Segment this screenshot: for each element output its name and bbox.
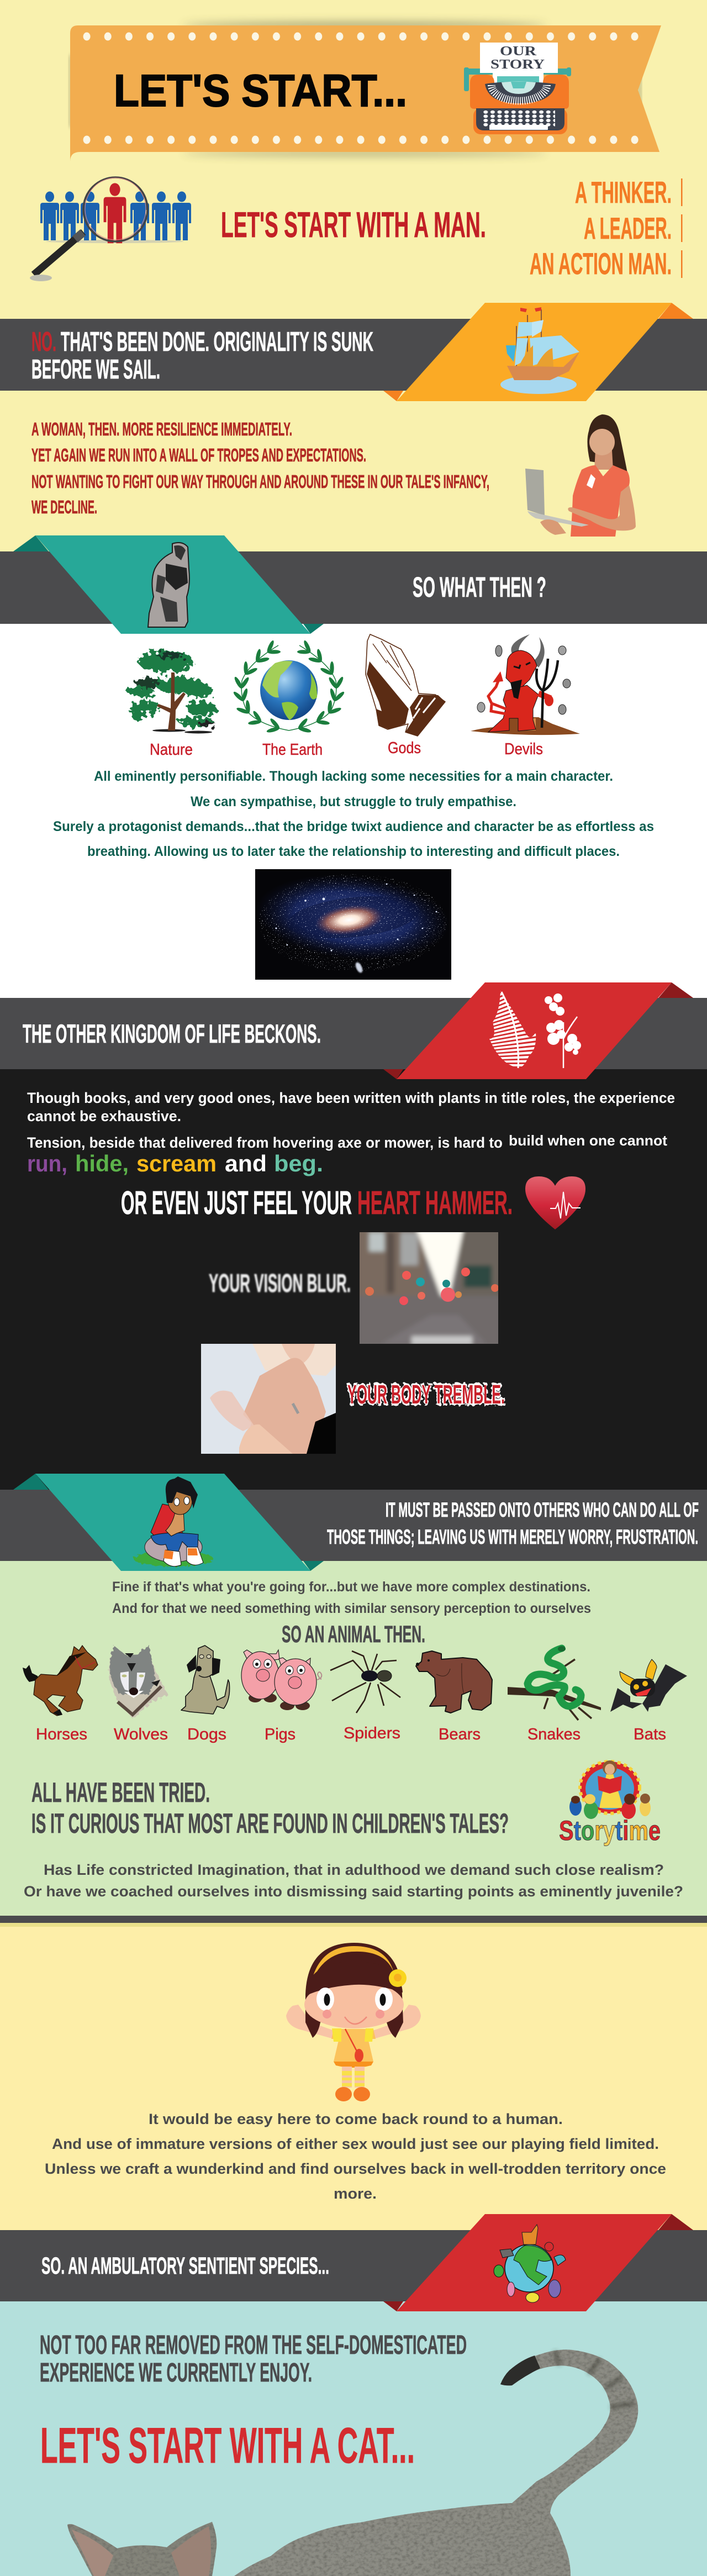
panel: animals green section (0, 1561, 707, 1916)
labels: animals: Horses (36, 1726, 87, 1743)
icon: horse (23, 1646, 98, 1716)
text: all eminently personifiable: breathing. Allowing us to later take the relationship to interesting and difficult places. (87, 844, 620, 859)
text: all eminently personifiable (53, 769, 654, 859)
ribbon: so what then (0, 535, 707, 634)
icon: crowd with magnifying glass (30, 177, 191, 281)
heading: let's start with a man: LET'S START WITH A MAN. (221, 204, 486, 245)
panel: let's start intro (0, 0, 707, 553)
heading: so an animal then: SO AN ANIMAL THEN. (282, 1621, 425, 1648)
text: it must be passed onto others (327, 1499, 699, 1548)
heading: heart hammer: HEART HAMMER. (357, 1185, 513, 1221)
labels: animals: Snakes (527, 1726, 581, 1743)
text: easy to come back to a human: It would be easy here to come back round to a human. (149, 2111, 563, 2127)
text: no that's been done: BEFORE WE SAIL. (31, 355, 160, 385)
text: no that's been done: THAT'S BEEN DONE. ORIGINALITY IS SUNK (61, 327, 373, 357)
heading: all have been tried (31, 1777, 509, 1839)
icon: little girl (286, 1943, 421, 2101)
text: a woman then: WE DECLINE. (31, 497, 97, 517)
icon: snake on branch (508, 1646, 601, 1720)
text: run hide scream beg (27, 1150, 323, 1176)
text: your vision blur: YOUR VISION BLUR. (209, 1269, 351, 1297)
image: cat body and tail (234, 2349, 638, 2576)
text: a woman then (31, 419, 489, 517)
text: plants paragraph: Though books, and very good ones, have been written with plants in title roles, the experience (27, 1090, 675, 1106)
banner ribbon (69, 22, 661, 161)
text: not too far removed (40, 2331, 467, 2388)
text: a woman then: A WOMAN, THEN. MORE RESILIENCE IMMEDIATELY. (31, 419, 292, 439)
icon: pigs (241, 1650, 321, 1710)
text: complex destinations (112, 1579, 591, 1616)
icon: praying hands (366, 634, 445, 736)
text: no that's been done: NO. (31, 327, 56, 357)
text: a woman then: YET AGAIN WE RUN INTO A WALL OF TROPES AND EXPECTATIONS. (31, 445, 366, 465)
icon: dog (181, 1646, 230, 1714)
icon: earth in wreath (232, 639, 346, 737)
ribbon: other kingdom of life (0, 982, 707, 1079)
ribbon: ambulatory sentient species (0, 2214, 707, 2311)
icon: spider (330, 1651, 400, 1713)
text: easy to come back to a human (45, 2111, 666, 2202)
icon: storytime badge (559, 1760, 661, 1846)
panel: other kingdom of life dark section (0, 1069, 707, 1490)
text: run hide scream beg: run, (27, 1150, 67, 1176)
text: your body tremble: YOUR BODY TREMBLE. (347, 1380, 505, 1410)
heading: ambulatory sentient species: SO. AN AMBULATORY SENTIENT SPECIES... (41, 2253, 329, 2279)
text: has life constricted imagination (24, 1862, 683, 1900)
icon: storytime badge: Storytime (559, 1815, 661, 1846)
text: plants paragraph: build when one cannot (509, 1132, 667, 1149)
image: galaxy (252, 867, 453, 980)
heading: other kingdom: THE OTHER KINGDOM OF LIFE BECKONS. (23, 1019, 321, 1048)
labels: personifications (150, 739, 543, 759)
image: cat head and ears (67, 2522, 217, 2576)
ribbon: it must be passed onto others (0, 1474, 707, 1571)
labels: personifications: Nature (150, 741, 193, 759)
heading: let's start with a cat: LET'S START WITH A CAT... (40, 2418, 415, 2474)
text: run hide scream beg: hide, (75, 1150, 129, 1176)
icon: woman with laptop (525, 414, 636, 537)
labels: animals (36, 1725, 666, 1743)
icon: bat (610, 1659, 687, 1712)
text: plants paragraph: cannot be exhaustive. (27, 1108, 181, 1124)
panel: cat teal section (0, 2301, 707, 2576)
text: plants paragraph: Tension, beside that delivered from hovering axe or mower, is hard to (27, 1134, 503, 1151)
text: complex destinations: And for that we need something with similar sensory perception to ourselves (112, 1601, 591, 1616)
text: complex destinations: Fine if that's what you're going for...but we have more complex destinations. (112, 1579, 590, 1595)
text: has life constricted imagination: Or have we coached ourselves into dismissing said starting points as eminently juvenile? (24, 1883, 683, 1900)
icon: globe with animals (494, 2225, 566, 2302)
heading: so what then: SO WHAT THEN ? (413, 571, 546, 603)
labels: animals: Pigs (265, 1726, 296, 1743)
heading: heart hammer: OR EVEN JUST FEEL YOUR (121, 1185, 352, 1221)
heading: all have been tried: ALL HAVE BEEN TRIED. (31, 1777, 210, 1808)
text: run hide scream beg: scream (136, 1150, 217, 1176)
panel: child section (0, 1916, 707, 2230)
text: has life constricted imagination: Has Life constricted Imagination, that in adulthood we demand such close realism? (44, 1862, 664, 1878)
labels: animals: Bats (634, 1726, 666, 1743)
ribbon: no that's been done (0, 303, 707, 401)
text: all eminently personifiable: Surely a protagonist demands...that the bridge twixt audience and character be as effortless as (53, 819, 654, 834)
icon: worried boy (134, 1476, 213, 1566)
text: not too far removed: EXPERIENCE WE CURRENTLY ENJOY. (40, 2358, 312, 2388)
text: run hide scream beg: beg. (274, 1150, 323, 1176)
icon: sailing ship (500, 307, 579, 394)
icon: tree (128, 650, 217, 734)
text: easy to come back to a human: And use of immature versions of either sex would just see our playing field limited. (52, 2136, 659, 2152)
text: easy to come back to a human: more. (334, 2185, 377, 2202)
icon: the thinker statue (148, 543, 189, 627)
text: traits list (530, 175, 683, 281)
text: your body tremble (347, 1380, 505, 1410)
labels: animals: Bears (439, 1726, 481, 1743)
text: your body tremble: YOUR BODY TREMBLE. (347, 1380, 505, 1410)
icon: typewriter (464, 43, 571, 134)
labels: personifications: The Earth (262, 741, 323, 759)
icon: typewriter: STORY (490, 57, 545, 72)
icon: heart with pulse (525, 1176, 585, 1229)
text: all eminently personifiable: We can sympathise, but struggle to truly empathise. (191, 794, 516, 809)
labels: personifications: Devils (504, 740, 543, 758)
labels: personifications: Gods (388, 739, 421, 757)
icon: bear (416, 1651, 492, 1713)
icon: fern (497, 986, 518, 1072)
image: blurred street (360, 1232, 498, 1344)
title: LET'S START... (114, 66, 407, 116)
text: easy to come back to a human: Unless we craft a wunderkind and find ourselves back in well-trodden territory once (45, 2160, 666, 2177)
text: no that's been done (31, 327, 373, 385)
text: run hide scream beg: and (225, 1150, 267, 1176)
icon: wolf (108, 1644, 168, 1718)
labels: animals: Spiders (344, 1725, 400, 1742)
panel: so what then personifications (0, 624, 707, 998)
icon: devil (471, 634, 580, 735)
image: trembling hand (201, 1344, 336, 1454)
text: all eminently personifiable: All eminently personifiable. Though lacking some necessities for a main character. (94, 769, 613, 784)
labels: animals: Dogs (187, 1726, 226, 1743)
icon: flowering sprig (545, 993, 581, 1068)
text: plants paragraph (27, 1090, 675, 1151)
labels: animals: Wolves (114, 1726, 168, 1743)
icon: typewriter: OUR (500, 44, 537, 59)
